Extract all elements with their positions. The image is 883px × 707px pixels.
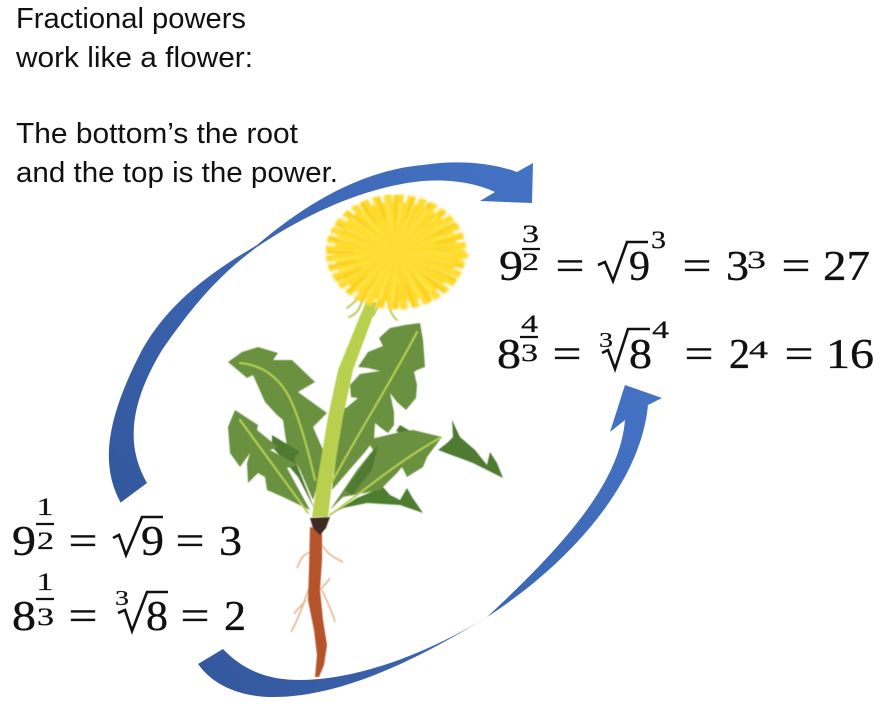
leaf: lower left bbox=[228, 410, 310, 510]
equation: 8^(1/3): 1 bbox=[36, 569, 54, 596]
equation: 9^(3/2): 9 bbox=[499, 244, 523, 290]
equation: 9^(3/2): 3 bbox=[726, 244, 749, 290]
equation: 8^(4/3): 8 bbox=[497, 332, 521, 378]
equation: 8^(1/3): = bbox=[180, 594, 210, 640]
equation: 8^(1/3): 3 bbox=[37, 604, 54, 631]
equation: 9^(3/2): = bbox=[782, 244, 810, 290]
flower spike bbox=[450, 240, 470, 266]
equation: 9^(3/2): 2 bbox=[522, 249, 539, 276]
equation: 9^(1/2) bbox=[12, 494, 242, 565]
rootlets bbox=[291, 545, 343, 632]
equation: 8^(1/3): 3 bbox=[115, 586, 129, 610]
equation: 9^(1/2): 9 bbox=[141, 519, 164, 565]
equation: 9^(3/2): 3 bbox=[651, 227, 666, 254]
equations: top right bbox=[497, 221, 874, 378]
taproot bbox=[308, 527, 327, 677]
equation: 8^(4/3): 4 bbox=[652, 317, 670, 344]
equation: 9^(1/2): = bbox=[176, 519, 204, 565]
equation: 9^(3/2): 3 bbox=[522, 221, 539, 248]
arrow: from bottom equations round to top equations bbox=[198, 385, 662, 697]
sepals bbox=[347, 298, 397, 320]
flower head bbox=[334, 202, 470, 302]
heading text: work like a flower: bbox=[15, 42, 253, 74]
petals bbox=[334, 202, 458, 302]
equation: 9^(1/2): 3 bbox=[219, 519, 242, 565]
leaf: upper left bbox=[228, 347, 327, 500]
equation: 9^(3/2): = bbox=[682, 244, 712, 290]
equation: 9^(1/2): = bbox=[68, 519, 98, 565]
equation: 8^(1/3): 2 bbox=[224, 594, 246, 640]
small dark leaf centre right bbox=[345, 445, 378, 495]
stem bbox=[312, 302, 377, 517]
leaf: upper right bbox=[332, 323, 425, 490]
equation: 8^(1/3): 8 bbox=[146, 594, 168, 640]
equation: 9^(3/2): 27 bbox=[823, 244, 870, 290]
equation: 8^(4/3): 8 bbox=[629, 332, 652, 378]
equation: 8^(4/3): 2 bbox=[729, 332, 750, 378]
equation: 8^(4/3): 4 bbox=[521, 311, 539, 338]
equation: 9^(3/2): 3 bbox=[747, 247, 766, 274]
equation: 8^(4/3): = bbox=[684, 332, 714, 378]
leaf: far right dark bbox=[438, 420, 503, 478]
equation: 8^(4/3): 4 bbox=[749, 337, 769, 364]
equation: 8^(4/3): = bbox=[552, 332, 582, 378]
arrow: from root equations up to power equations bbox=[109, 162, 533, 503]
equation: 8^(1/3): = bbox=[68, 594, 98, 640]
equation: 9^(3/2): = bbox=[556, 244, 584, 290]
heading text bbox=[15, 3, 338, 189]
equation: 9^(1/2): 2 bbox=[37, 528, 54, 555]
leaf: bottom right dark bbox=[330, 487, 423, 515]
equation: 9^(3/2) bbox=[499, 221, 870, 290]
crown bbox=[310, 517, 330, 535]
equation: 8^(4/3): = bbox=[784, 332, 814, 378]
equation: 9^(3/2): 9 bbox=[629, 244, 650, 290]
leaf veins bbox=[240, 332, 440, 515]
equation: 8^(4/3): 3 bbox=[599, 328, 613, 352]
heading text: Fractional powers bbox=[16, 3, 246, 35]
heading text: and the top is the power. bbox=[16, 157, 338, 189]
leaf: small dark behind lower right bbox=[396, 425, 412, 436]
equation: 8^(4/3): 16 bbox=[826, 332, 874, 378]
heading text: The bottom’s the root bbox=[16, 118, 298, 150]
dandelion illustration bbox=[228, 298, 503, 677]
equation: 8^(1/3) bbox=[12, 569, 246, 640]
leaf: small dark centre left bbox=[272, 435, 315, 510]
equation: 8^(4/3): 3 bbox=[521, 340, 538, 367]
leaf: lower right bbox=[330, 430, 442, 510]
root bbox=[291, 517, 343, 677]
equation: 8^(1/3): 8 bbox=[12, 594, 36, 640]
equation: 9^(1/2): 9 bbox=[12, 519, 36, 565]
equation: 9^(1/2): 1 bbox=[36, 494, 54, 521]
equation: 8^(4/3) bbox=[497, 311, 874, 378]
equations: bottom left bbox=[12, 494, 246, 640]
